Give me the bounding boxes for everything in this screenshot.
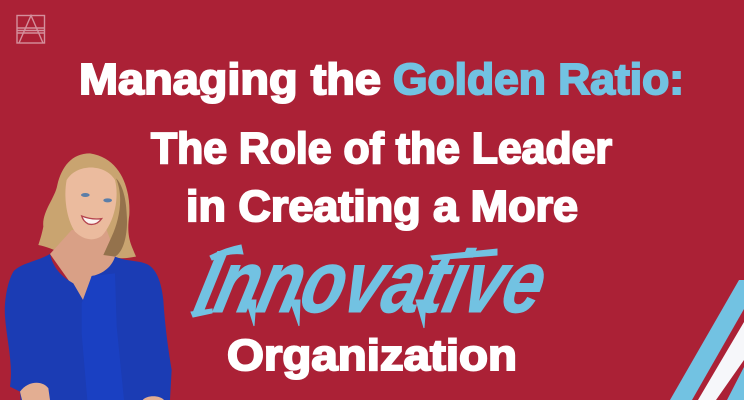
eyes [81, 193, 112, 202]
placket [82, 273, 124, 400]
left hand [20, 383, 50, 400]
decorative stripes [670, 280, 744, 400]
skin: neck and chest [50, 230, 117, 303]
icon: logo [17, 16, 44, 43]
smile [82, 216, 102, 224]
right hand [143, 396, 164, 400]
brush flourishes [191, 245, 497, 328]
title: line three: in Creating a More [186, 182, 578, 231]
face [65, 167, 117, 239]
title: line one: Managing the [79, 55, 381, 104]
title: last line: Organization [227, 331, 517, 380]
title: line two: The Role of the Leader [151, 124, 612, 173]
script word: Innovative: Innovative [187, 232, 557, 331]
hair [38, 153, 136, 258]
title: highlighted phrase: Golden Ratio: [393, 55, 684, 104]
photo: woman in blue blouse [5, 153, 172, 400]
hair shade right [103, 178, 127, 257]
blouse [5, 254, 172, 400]
